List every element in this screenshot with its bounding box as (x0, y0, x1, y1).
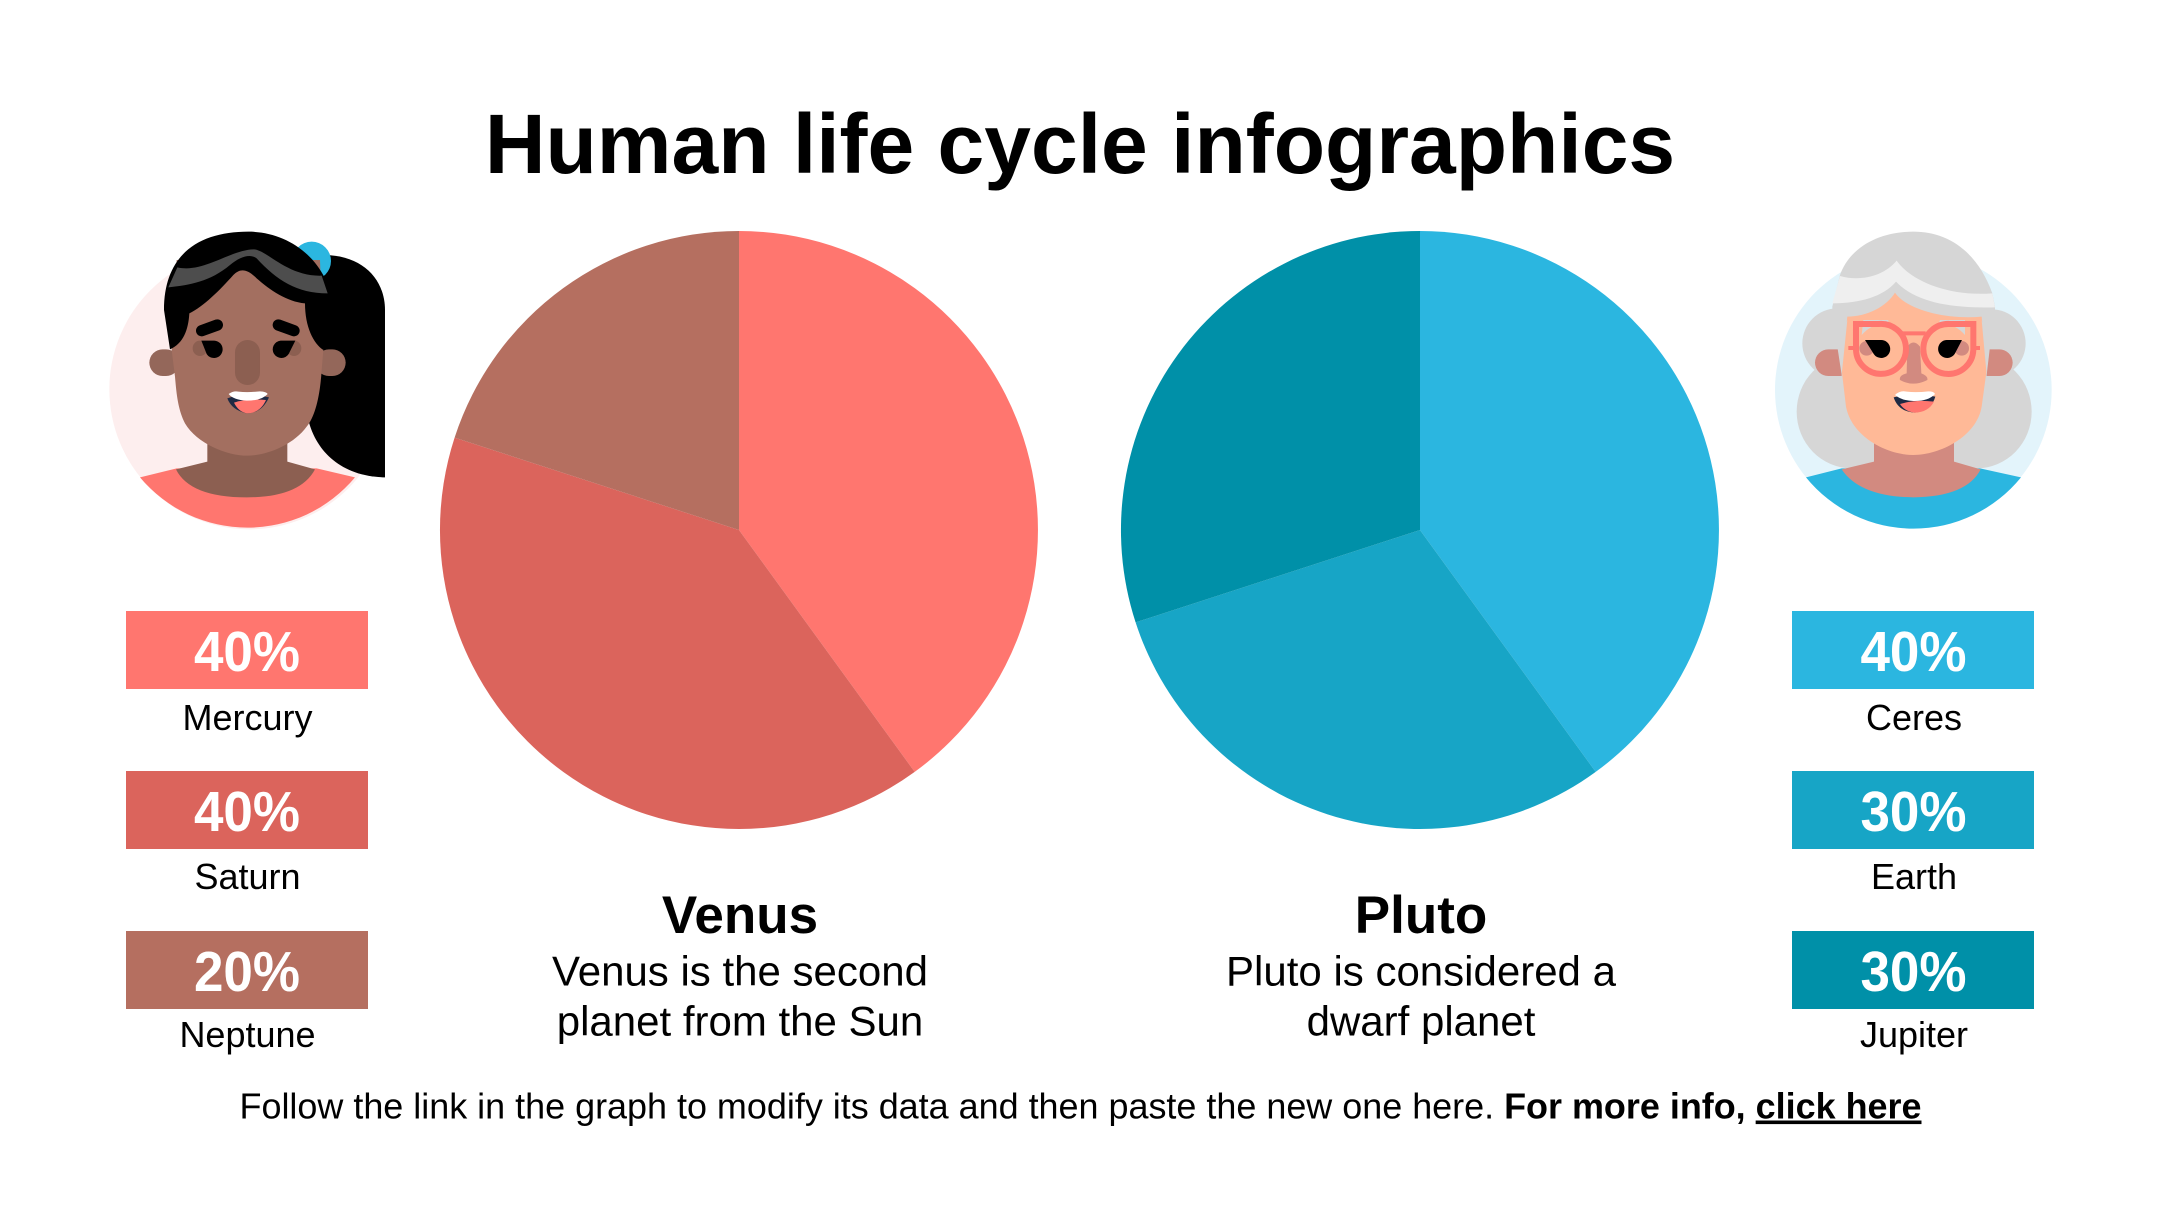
pie chart: Pluto (1121, 231, 1719, 829)
legend: Mercury 40%: Mercury (182, 697, 313, 738)
legend: Neptune 20% (126, 931, 368, 1055)
legend: Ceres 40% (1792, 611, 2034, 738)
text block: Venus: Venus (662, 886, 818, 945)
icon: elderly woman avatar (1775, 232, 2052, 529)
legend: Jupiter 30%: Jupiter (1860, 1014, 1968, 1055)
legend: Earth 30%: Earth (1871, 856, 1957, 897)
legend: Mercury 40% (126, 611, 368, 738)
text block: Pluto (1226, 886, 1617, 1044)
text block: Pluto: Pluto is considered a (1226, 948, 1617, 994)
text block: Pluto: Pluto (1355, 886, 1487, 945)
legend: Mercury 40%: 40% (194, 619, 300, 683)
legend: Saturn 40%: Saturn (194, 856, 301, 897)
legend: Neptune 20%: Neptune (179, 1014, 316, 1055)
footer note: Follow the link in the graph to modify its data and then paste the new one here. For more info, click here (240, 1086, 1921, 1126)
legend: Earth 30% (1792, 771, 2034, 897)
legend: Jupiter 30%: 30% (1860, 939, 1967, 1003)
text block: Pluto: dwarf planet (1307, 998, 1536, 1044)
text block: Venus: Venus is the second (552, 948, 928, 994)
text block: Venus (552, 886, 928, 1044)
legend: Saturn 40%: 40% (194, 779, 300, 843)
legend: Ceres 40%: Ceres (1866, 697, 1962, 738)
legend: Ceres 40%: 40% (1860, 619, 1967, 683)
text block: Venus: planet from the Sun (557, 998, 923, 1044)
pie chart: Venus (440, 231, 1038, 829)
legend: Jupiter 30% (1792, 931, 2034, 1055)
title: Human life cycle infographics (485, 97, 1675, 191)
legend: Saturn 40% (126, 771, 368, 897)
icon: young woman avatar (109, 232, 395, 529)
legend: Neptune 20%: 20% (194, 939, 300, 1003)
legend: Earth 30%: 30% (1860, 779, 1967, 843)
